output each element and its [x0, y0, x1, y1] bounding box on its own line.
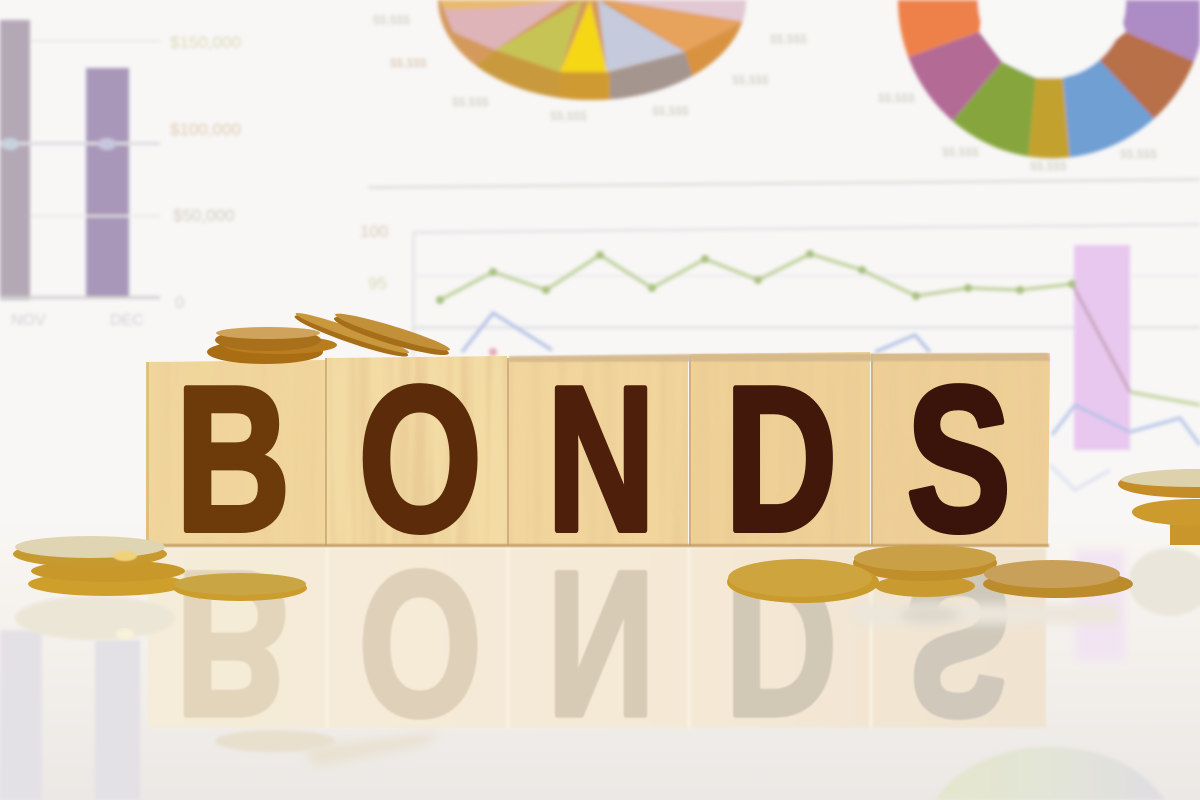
left bar chart [0, 20, 241, 329]
pie chart labels: $$,$$$ [373, 13, 410, 27]
letters [176, 343, 1011, 575]
left bar chart: $50,000 [173, 206, 234, 225]
coins left [13, 536, 307, 601]
block S [873, 353, 1050, 546]
pie chart labels: $$,$$$ [390, 56, 427, 70]
coins far right [1118, 469, 1200, 545]
line chart: 100 [360, 222, 388, 241]
left bar chart: 0 [175, 293, 184, 312]
reflection of blocks [148, 548, 1046, 728]
block B [146, 360, 325, 546]
pie chart labels: $$,$$$ [652, 104, 689, 118]
block N [509, 356, 688, 546]
reflected letters: N [547, 528, 655, 758]
reflected letters: D [725, 529, 837, 759]
pie chart labels [373, 13, 807, 123]
donut chart labels: $$,$$$ [1120, 147, 1157, 161]
donut chart labels [878, 91, 1157, 173]
table surface [0, 515, 1200, 800]
pie chart labels: $$,$$$ [732, 73, 769, 87]
reflected letters: O [358, 529, 482, 759]
letter S: S [906, 343, 1011, 574]
reflected letters: B [176, 529, 290, 760]
block O [327, 356, 507, 546]
reflected letters [176, 528, 1011, 760]
line chart: 95 [368, 274, 387, 293]
coins on top of blocks [207, 309, 452, 364]
pie chart labels: $$,$$$ [770, 32, 807, 46]
blurred background charts [0, 0, 1200, 490]
donut chart labels: $$,$$$ [878, 91, 915, 105]
donut chart labels: $$,$$$ [1030, 159, 1067, 173]
coin reflections [15, 548, 1200, 767]
pie chart labels: $$,$$$ [550, 109, 587, 123]
block D [691, 352, 870, 546]
left bar chart: NOV [11, 312, 46, 329]
donut chart labels: $$,$$$ [942, 145, 979, 159]
letter N: N [547, 345, 655, 575]
letter D: D [725, 344, 837, 574]
donut chart [895, 0, 1200, 161]
left bar chart: $100,000 [170, 120, 241, 139]
letter O: O [358, 344, 482, 574]
letter B: B [176, 343, 290, 574]
coins right [727, 545, 1133, 603]
wooden blocks [146, 352, 1050, 547]
pie chart labels: $$,$$$ [452, 95, 489, 109]
pie chart [438, 0, 746, 100]
line chart [360, 178, 1200, 490]
left bar chart: DEC [110, 312, 144, 329]
reflection of background charts [0, 550, 1165, 800]
left bar chart: $150,000 [170, 33, 241, 52]
reflected letters: S [906, 529, 1011, 760]
